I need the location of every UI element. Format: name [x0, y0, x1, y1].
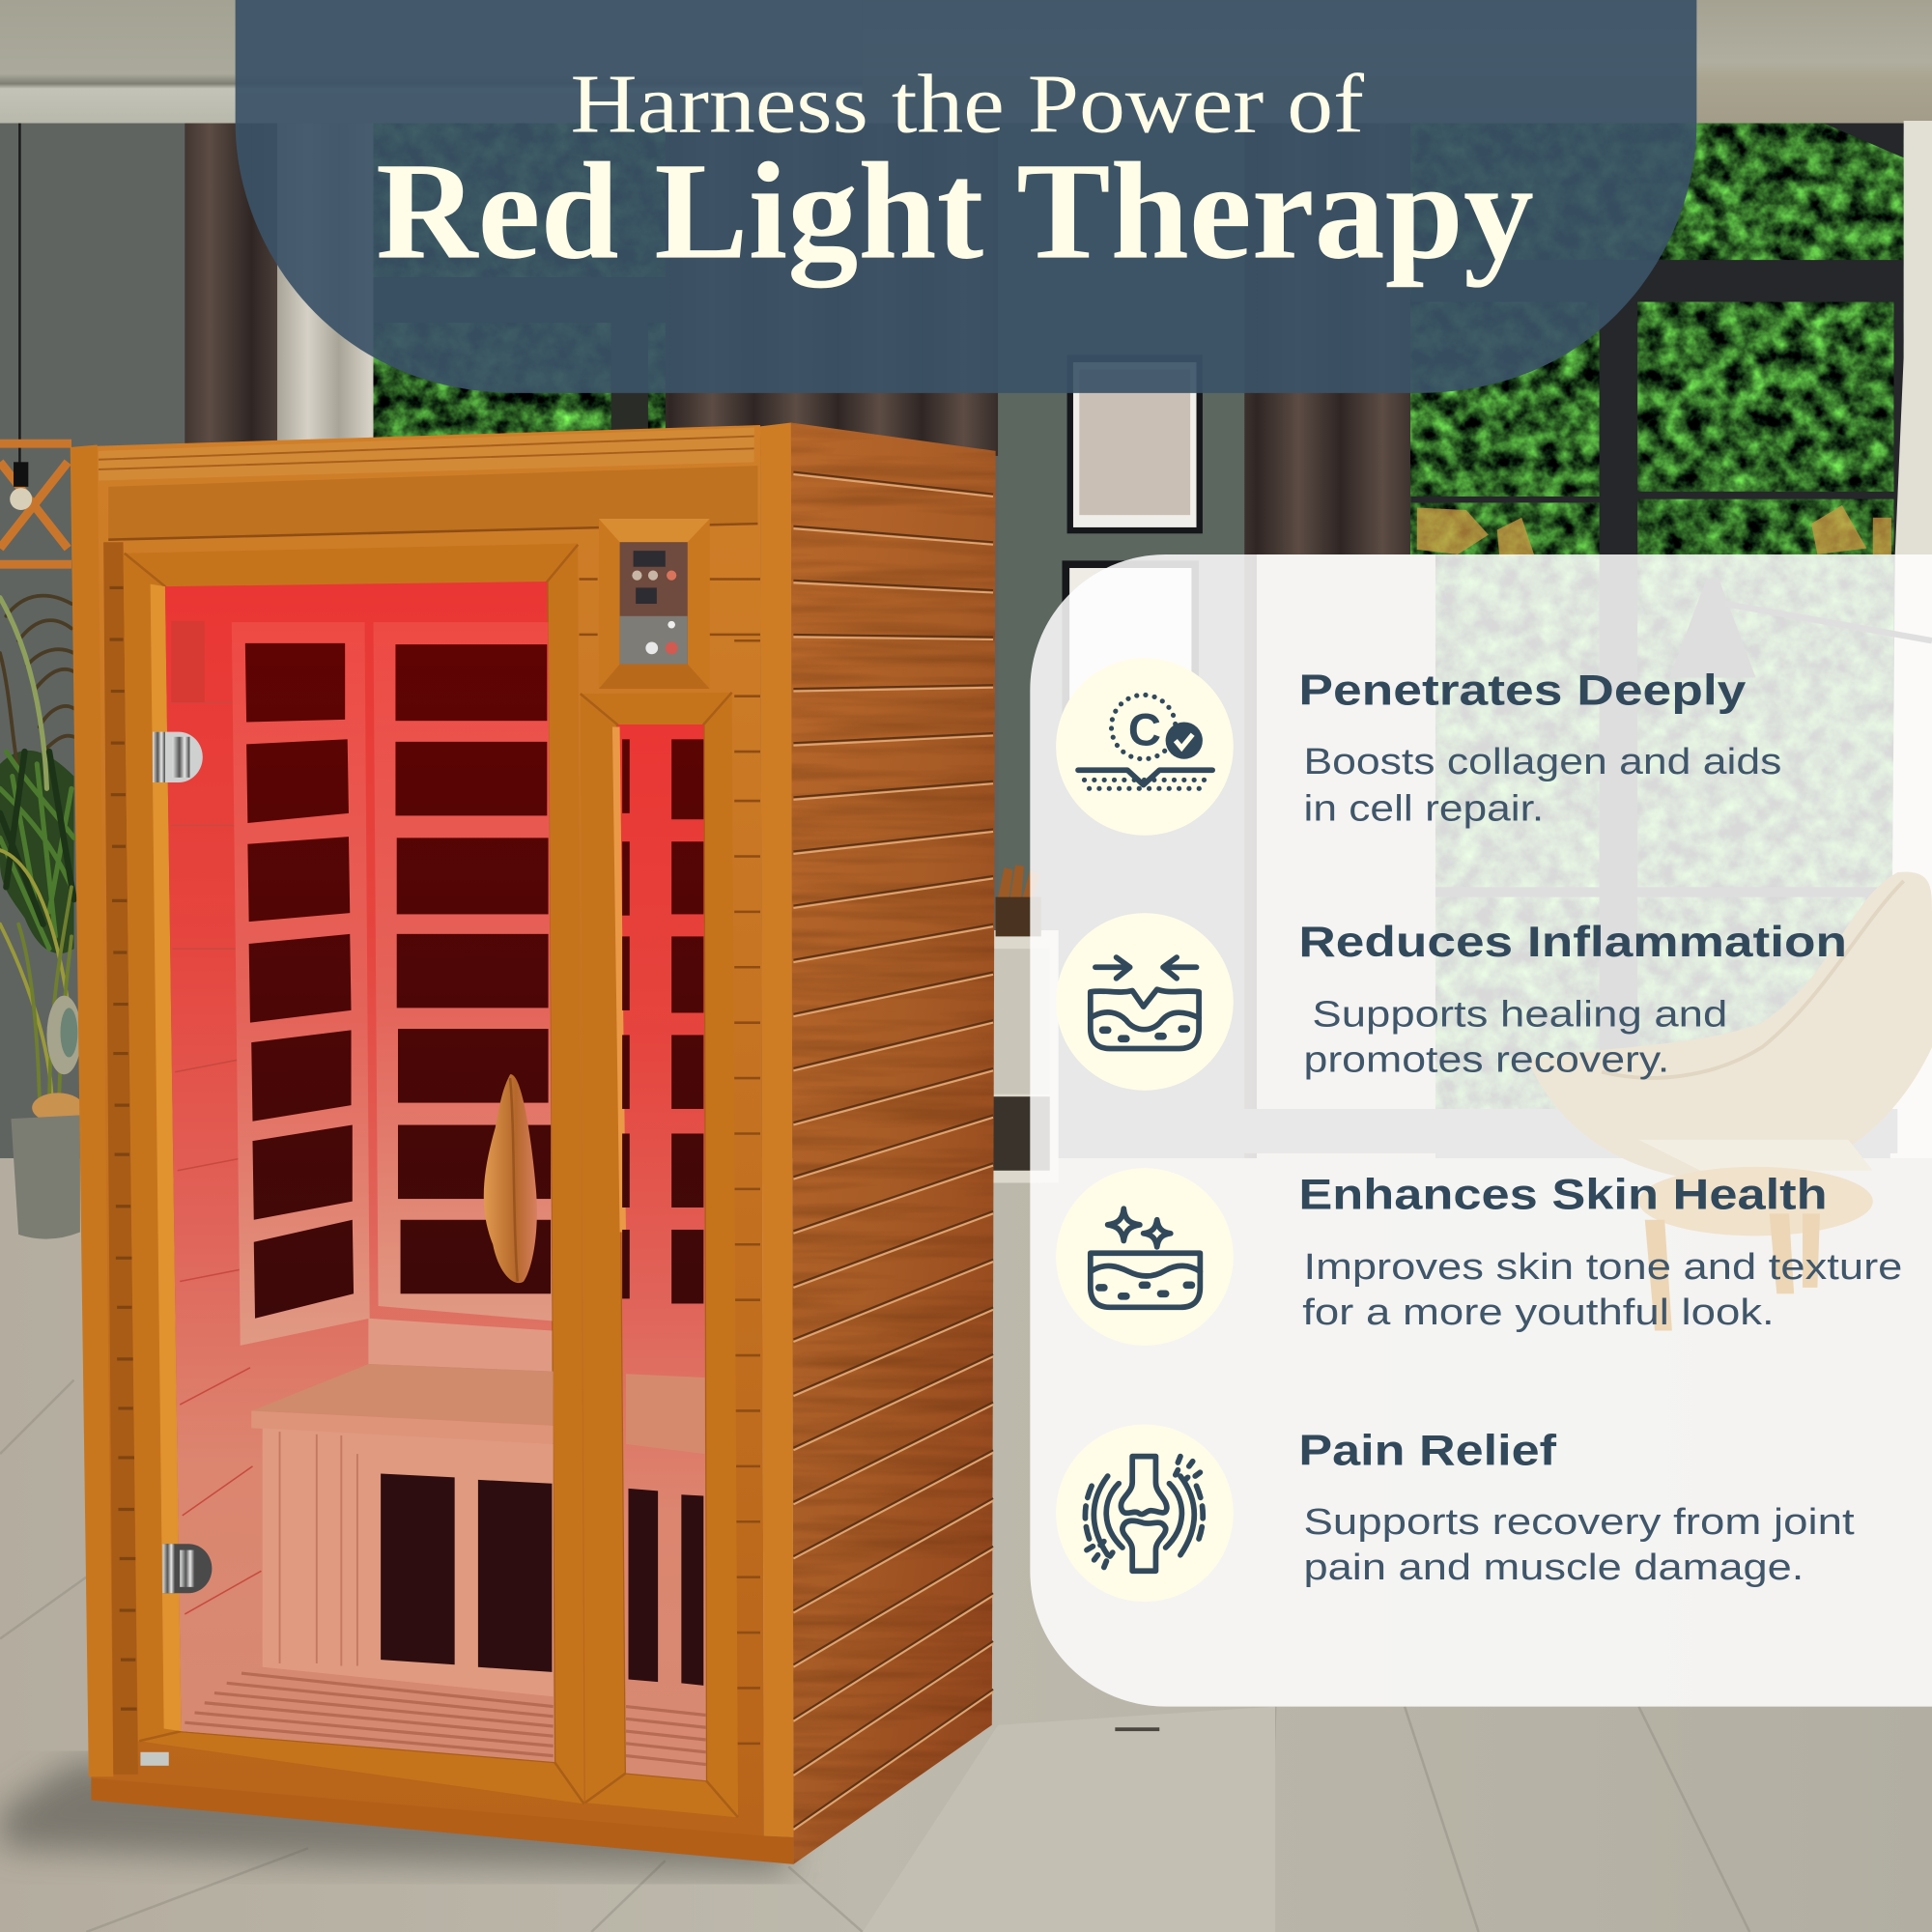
lamp bulb — [10, 462, 32, 510]
icon: collagen skin: C — [1128, 705, 1161, 756]
left white curtain — [277, 124, 373, 456]
benefit: enhances skin health — [1056, 1168, 1902, 1346]
floor stain — [1115, 1727, 1159, 1731]
side glass — [617, 724, 706, 1780]
side table — [32, 1093, 84, 1122]
right trim notches — [734, 640, 760, 1744]
right white curtain — [1890, 121, 1932, 1171]
door glass interior — [165, 582, 554, 1762]
plant pot — [11, 1115, 80, 1239]
left pillar — [71, 444, 113, 1776]
left dark curtain — [185, 124, 277, 456]
picture frame — [1067, 355, 1203, 533]
under-bench boards — [280, 1432, 357, 1665]
description: for a more youthful look. — [1302, 1292, 1775, 1333]
side door bevel — [581, 693, 738, 1817]
bright leaves at window bottom — [1417, 505, 1891, 557]
floor planks — [0, 1380, 1749, 1932]
heading: Pain Relief — [1298, 1428, 1556, 1475]
side lower panels — [629, 1489, 703, 1686]
door frame bevel — [125, 545, 584, 1804]
floor grate — [183, 1667, 554, 1761]
side slat shadows — [793, 472, 993, 1828]
floor lamp — [1669, 579, 1932, 678]
description — [1303, 993, 1727, 1081]
skirting — [1060, 1109, 1897, 1153]
top hinge — [153, 732, 203, 782]
under-bench panel — [263, 1428, 554, 1696]
crown moulding — [99, 428, 754, 480]
round ornament — [46, 996, 81, 1074]
header board — [108, 466, 757, 540]
description — [1303, 741, 1781, 829]
door frame — [124, 543, 584, 1804]
bottom hinge — [162, 1544, 212, 1593]
bench front — [251, 1410, 554, 1444]
right brown curtain — [1244, 124, 1410, 1182]
under-bench dark panels — [381, 1474, 552, 1672]
plant — [0, 596, 74, 1096]
heading: Reduces Inflammation — [1298, 919, 1847, 966]
title line 1: Harness the Power of — [571, 57, 1364, 150]
icon: collagen skin — [1056, 658, 1234, 836]
back wall dark panels — [395, 644, 551, 1293]
left trim shadow — [103, 542, 138, 1775]
header banner — [236, 0, 1696, 393]
side bright edge — [612, 727, 626, 1233]
sheer curtain under panel — [1257, 554, 1435, 1171]
left panel frame — [232, 622, 370, 1346]
heading: Penetrates Deeply — [1298, 668, 1747, 715]
description — [1302, 1246, 1902, 1333]
benefit: reduces inflammation — [1056, 913, 1847, 1091]
description — [1303, 1501, 1855, 1588]
bench top — [251, 1364, 554, 1426]
description: promotes recovery. — [1303, 1039, 1669, 1081]
wooden lamp frame — [0, 443, 71, 564]
front base — [91, 1778, 793, 1864]
description: pain and muscle damage. — [1303, 1547, 1804, 1588]
side grain — [791, 423, 996, 1864]
back panel frame — [373, 622, 552, 1321]
description: in cell repair. — [1303, 787, 1544, 829]
handle — [484, 1074, 537, 1283]
front face — [91, 425, 764, 1838]
side glass bench — [626, 1374, 705, 1454]
chair — [1528, 872, 1932, 1331]
control box — [599, 519, 710, 689]
floor — [0, 1158, 1932, 1932]
bench back wall — [368, 1319, 552, 1372]
side slat highlights — [793, 474, 993, 1830]
side door frame — [581, 693, 738, 1817]
second picture frame — [1062, 560, 1199, 739]
side glass dark panels — [622, 739, 703, 1303]
centre wall — [998, 124, 1251, 1182]
benefit: penetrates deeply — [1056, 658, 1781, 836]
white cabinet — [993, 930, 1059, 1182]
left trim blocks — [110, 587, 137, 1709]
hanging lamp cord — [18, 124, 20, 493]
side face — [791, 423, 996, 1864]
right pillar — [760, 423, 793, 1837]
sauna cabin — [71, 423, 996, 1864]
badge — [140, 1752, 169, 1766]
left window frame — [373, 277, 666, 431]
right window frames — [1410, 124, 1904, 1122]
left wall — [0, 124, 185, 1158]
door glass edge — [151, 584, 182, 1731]
title line 2: Red Light Therapy — [376, 135, 1534, 289]
left window foliage — [373, 124, 666, 438]
front slat lines — [579, 579, 760, 635]
icon: healthy skin — [1056, 1168, 1234, 1346]
ceiling — [0, 0, 1932, 124]
benefit: pain relief — [1056, 1424, 1855, 1602]
description: Supports healing and — [1312, 993, 1727, 1035]
title — [376, 57, 1534, 289]
floor slats — [185, 1673, 554, 1756]
floor shadow — [0, 1762, 788, 1873]
floor light — [863, 1707, 1275, 1932]
description: Supports recovery from joint — [1303, 1501, 1855, 1543]
heading: Enhances Skin Health — [1298, 1171, 1828, 1218]
wall label — [171, 621, 205, 702]
middle dark curtain — [666, 124, 998, 456]
side floor slats — [626, 1707, 706, 1765]
icon: joint — [1056, 1424, 1234, 1602]
left wall boards — [170, 702, 261, 1614]
description: Boosts collagen and aids — [1303, 741, 1781, 782]
right window foliage — [1410, 124, 1904, 1122]
description: Improves skin tone and texture — [1303, 1246, 1902, 1288]
book basket — [996, 865, 1041, 936]
icon: inflamed skin — [1056, 913, 1234, 1091]
panel: benefits — [1030, 554, 1932, 1707]
left wall dark panels — [245, 643, 354, 1319]
